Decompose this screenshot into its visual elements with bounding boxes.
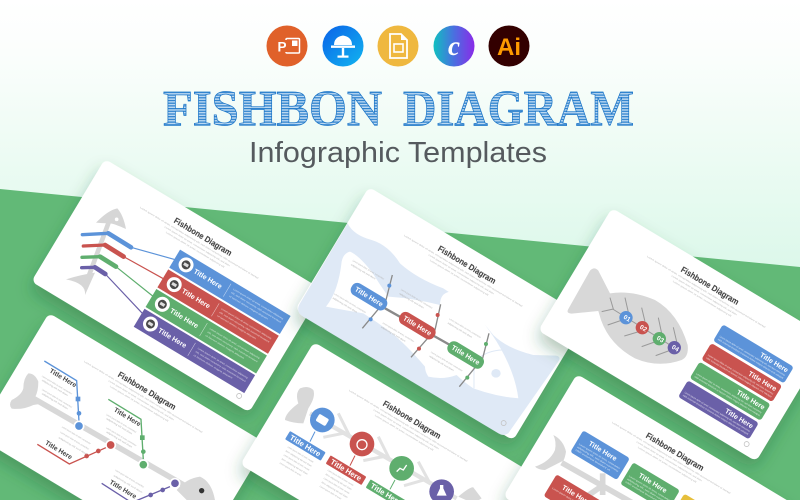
rib captions: Lorem ipsum dolor sit amet, consectetur	[333, 293, 367, 314]
green bar: Lorem ipsum dolor sit amet, consectetur adipiscing	[209, 327, 261, 360]
panel: slide 5 icon circles	[240, 342, 532, 500]
gray fish	[568, 268, 688, 364]
green card: Lorem ipsum dolor sit amet, consectetur adipiscing elit, sed diam nonummy	[695, 373, 763, 415]
tab captions: Lorem ipsum dolor sit amet	[279, 462, 302, 477]
red bar	[157, 269, 279, 354]
node 03	[653, 332, 666, 345]
tab captions: Lorem ipsum dolor sit amet, consec	[287, 446, 315, 464]
rib captions: adipiscing elit sed diam	[350, 263, 376, 280]
purple bar: ut laoreet dolore magna aliquam	[193, 354, 233, 380]
node 04	[668, 341, 681, 354]
slide 6 intro text: Lorem ipsum dolor sit amet, consectetur adipiscing elit	[637, 446, 697, 484]
rib captions: adipiscing elit sed diam	[332, 297, 358, 314]
branch captions: Lorem ipsum dolor sit amet, consectetur	[41, 388, 73, 409]
title: FISHBON	[163, 82, 382, 138]
panel: slide 3 numbered fish	[538, 208, 800, 461]
green node	[389, 456, 414, 489]
red branch	[37, 440, 115, 464]
branch captions: adipiscing elit sed diam	[41, 392, 68, 410]
green bar: elit, sed diam nonummy nibh euismod tincidunt	[207, 331, 258, 363]
branch captions: Lorem ipsum dolor sit amet, consectetur	[59, 431, 90, 451]
panel: slide 1 bars	[31, 159, 323, 412]
slide 1 footer icon	[236, 392, 243, 399]
slide 3 intro text: Lorem ipsum dolor sit amet, consectetur adipiscing elit	[672, 280, 732, 318]
slide 6 heading: Fishbone Diagram	[644, 430, 706, 473]
icon: PowerPoint	[266, 26, 308, 66]
red card	[544, 474, 603, 500]
blue card	[570, 430, 630, 480]
rib captions: adipiscing elit sed diam	[380, 326, 406, 343]
slide 1 intro text	[135, 206, 260, 287]
branch captions: Lorem ipsum dolor sit amet, consectetur	[114, 469, 145, 489]
gray fish skeleton	[535, 435, 633, 500]
blue bone	[82, 233, 174, 259]
green diagonal band	[0, 189, 800, 500]
slide 1 heading: Fishbone Diagram	[172, 215, 234, 258]
tab captions: Lorem ipsum dolor sit amet, consec	[327, 469, 355, 487]
red bar: ut laoreet dolore magna aliquam	[217, 314, 257, 340]
red bar: Title Here	[180, 288, 211, 310]
branch captions: adipiscing elit sed diam	[113, 474, 143, 494]
blue card: nibh euismod tincidunt ut	[575, 449, 611, 472]
blue rib	[362, 275, 392, 328]
node 01	[619, 311, 633, 324]
green card: nibh euismod tincidunt ut	[625, 481, 661, 500]
slide 2 intro text: Lorem ipsum dolor sit amet, consectetur adipiscing elit	[429, 259, 489, 297]
green pill	[445, 339, 486, 371]
slide 2 intro text: Lorem ipsum dolor sit amet, consectetur adipiscing elit, sed diam	[428, 254, 495, 295]
blue branch	[44, 361, 84, 431]
branch titles: Title Here	[48, 368, 78, 389]
branch captions: Lorem ipsum dolor sit amet, consectetur	[41, 375, 73, 396]
branch titles	[44, 368, 142, 500]
red pill: Title Here	[402, 315, 432, 338]
red node	[350, 432, 374, 466]
blue card: Lorem ipsum dolor sit amet, consectetur	[578, 443, 621, 470]
panel: slide 6 cards	[503, 374, 795, 500]
green card: Lorem ipsum dolor sit amet, consectetur	[628, 475, 671, 500]
slide 2 footer icon	[500, 420, 507, 426]
node 02	[636, 321, 649, 334]
slide 6 intro text: Lorem ipsum dolor sit amet, consectetur adipiscing elit, sed diam	[636, 441, 703, 482]
branch captions: Lorem ipsum dolor sit amet, consectetur	[61, 426, 91, 445]
icon: Canva	[434, 26, 474, 66]
purple bar: Title Here	[157, 327, 187, 350]
slide 4 intro text	[79, 360, 204, 441]
slide 4 heading: Fishbone Diagram	[116, 369, 178, 412]
slide 2 intro text: Lorem ipsum dolor sit amet, consectetur adipiscing elit, sed diam nonummy nibh euismod tincidunt ut laoreet	[403, 234, 524, 308]
purple bar	[134, 309, 255, 393]
tab captions	[279, 446, 355, 500]
white fish	[326, 252, 518, 398]
blue bar: Title Here	[192, 268, 223, 291]
green card: nibh euismod tincidunt ut laoreet dolore magna aliquam erat volutpat	[694, 375, 761, 417]
purple card: Lorem ipsum dolor sit amet, consectetur adipiscing elit, sed diam nonummy	[684, 391, 751, 433]
slide 4 intro text: Lorem ipsum dolor sit amet, consectetur adipiscing elit, sed diam nonummy nibh euismod tincidunt ut laoreet	[83, 360, 204, 434]
slide 3 intro text: Lorem ipsum dolor sit amet, consectetur adipiscing elit, sed diam	[671, 275, 738, 316]
red bone	[83, 245, 163, 278]
tab captions: tetur adipiscing elit sed diam	[281, 458, 308, 476]
red bar: elit, sed diam nonummy nibh euismod tincidunt	[219, 311, 270, 344]
blue card: Title Here	[758, 352, 789, 374]
node 02: 02	[638, 324, 648, 334]
purple branch	[102, 479, 180, 500]
purple bar: elit, sed diam nonummy nibh euismod tincidunt	[195, 350, 247, 383]
blue bar	[169, 250, 291, 334]
red card: nibh euismod tincidunt ut laoreet dolore magna aliquam erat volutpat	[705, 357, 772, 399]
branch captions	[41, 375, 145, 494]
branch captions: adipiscing elit sed diam	[105, 431, 133, 449]
branch titles: Title Here	[44, 440, 73, 461]
rib captions: Lorem ipsum dolor sit amet, consectetur	[400, 288, 433, 310]
rib captions: Lorem ipsum dolor sit amet, consectetur	[382, 322, 415, 343]
green card	[690, 362, 771, 421]
green bar: Title Here	[168, 308, 199, 330]
red card: Lorem ipsum dolor sit amet, consectetur adipiscing elit, sed diam nonummy	[707, 354, 775, 396]
purple node	[429, 479, 454, 500]
blue card: Lorem ipsum dolor sit amet, consectetur adipiscing elit, sed diam nonummy	[719, 335, 786, 377]
blue card: nibh euismod tincidunt ut laoreet dolore magna aliquam erat volutpat	[717, 338, 784, 380]
purple card	[678, 380, 759, 439]
tab captions: Lorem ipsum dolor sit amet, consec	[323, 477, 351, 495]
slide 5 intro text: Lorem ipsum dolor sit amet, consectetur adipiscing elit, sed diam	[373, 409, 440, 450]
rib captions: adipiscing elit sed diam	[398, 292, 424, 309]
node 03: 03	[655, 335, 665, 345]
blue card: Title Here	[587, 441, 618, 463]
green card: Title Here	[735, 389, 766, 412]
green bone	[82, 257, 153, 296]
red card: Title Here	[747, 371, 778, 393]
branch captions: adipiscing elit sed diam	[58, 436, 88, 456]
red rib	[411, 304, 441, 357]
gray fish skeleton	[10, 373, 215, 500]
blue tab: Title Here	[288, 433, 322, 459]
slide 1 intro text: Lorem ipsum dolor sit amet, consectetur adipiscing elit	[165, 231, 225, 269]
blue card	[713, 324, 794, 383]
slide 3 footer icon	[743, 441, 750, 447]
icon: Keynote	[322, 26, 364, 66]
blue bar: ut laoreet dolore magna aliquam	[228, 295, 269, 321]
green bar: ut laoreet dolore magna aliquam	[205, 334, 245, 360]
icon: Canva: c	[448, 31, 460, 61]
red card	[701, 343, 782, 402]
green card: Title Here	[637, 473, 668, 495]
spine	[385, 308, 450, 345]
rib captions: Lorem ipsum dolor sit amet, consectetur	[352, 259, 385, 281]
fish eye and gill	[474, 350, 503, 388]
tab captions: tetur adipiscing elit sed diam	[321, 481, 348, 499]
slide 1 intro text: Lorem ipsum dolor sit amet, consectetur adipiscing elit, sed diam	[164, 226, 231, 267]
green bar	[146, 289, 267, 373]
branch titles: Title Here	[108, 479, 138, 500]
green branch	[108, 399, 148, 469]
rib captions: adipiscing elit sed diam	[428, 355, 454, 372]
rib captions	[332, 259, 482, 372]
slide 6 intro text	[607, 421, 732, 500]
blue pill: Title Here	[353, 286, 384, 309]
panel: slide 2 fish background	[295, 187, 587, 440]
title: DIAGRAM	[403, 82, 634, 138]
background	[0, 0, 800, 268]
purple bone	[82, 267, 142, 313]
red pill	[397, 310, 438, 342]
slide 3 intro text	[642, 255, 767, 336]
blue node	[310, 408, 335, 442]
icon: PowerPoint: P	[278, 40, 287, 54]
tab captions: tetur adipiscing elit sed diam	[285, 450, 312, 468]
tab captions: Lorem ipsum dolor sit amet, consec	[283, 454, 311, 472]
blue card: adipiscing elit, sed diam nonummy	[576, 446, 620, 473]
slide 3 intro text: Lorem ipsum dolor sit amet, consectetur adipiscing elit, sed diam nonummy nibh euismod tincidunt ut laoreet	[646, 255, 767, 329]
purple card: Title Here	[723, 408, 754, 430]
purple card: nibh euismod tincidunt ut laoreet dolore magna aliquam erat volutpat	[682, 394, 749, 436]
branch captions: Lorem ipsum dolor sit amet, consectetur	[105, 413, 137, 434]
blue pill	[348, 281, 390, 313]
light blue sea shape	[298, 223, 560, 435]
subtitle: Infographic Templates	[249, 137, 547, 169]
fish bones	[602, 298, 677, 356]
slide 5 intro text: Lorem ipsum dolor sit amet, consectetur adipiscing elit, sed diam nonummy nibh euismod tincidunt ut laoreet	[348, 389, 469, 463]
slide 3 heading: Fishbone Diagram	[679, 264, 741, 307]
branch captions: adipiscing elit sed diam	[105, 417, 133, 435]
rib captions: adipiscing elit sed diam	[447, 322, 473, 339]
icon: Google Slides	[378, 26, 418, 66]
tab captions: tetur adipiscing elit sed diam	[325, 473, 352, 491]
green card	[620, 462, 680, 500]
branch titles: Title Here	[112, 407, 142, 428]
slide 5 intro text: Lorem ipsum dolor sit amet, consectetur adipiscing elit	[374, 414, 434, 452]
rib captions: Lorem ipsum dolor sit amet, consectetur	[448, 318, 482, 339]
red tab: Title Here	[329, 457, 363, 483]
slide 2 intro text	[399, 234, 524, 315]
green card: adipiscing elit, sed diam nonummy	[626, 478, 670, 500]
purple bar: Lorem ipsum dolor sit amet, consectetur adipiscing	[197, 347, 249, 380]
slide 4 intro text: Lorem ipsum dolor sit amet, consectetur adipiscing elit	[109, 385, 169, 423]
title	[163, 82, 634, 138]
red bar: Lorem ipsum dolor sit amet, consectetur adipiscing	[221, 308, 273, 341]
slide 6 intro text: Lorem ipsum dolor sit amet, consectetur adipiscing elit, sed diam nonummy nibh euismod tincidunt ut laoreet	[611, 421, 732, 495]
green pill: Title Here	[450, 345, 481, 367]
icon: Illustrator	[488, 26, 530, 66]
branch captions: adipiscing elit sed diam	[41, 379, 68, 397]
gray fish with ribs	[285, 387, 482, 500]
rib captions: Lorem ipsum dolor sit amet, consectetur	[430, 351, 463, 372]
app icons row	[266, 26, 530, 66]
panel: slide 4 timeline fishbone	[0, 313, 267, 500]
node 04: 04	[670, 344, 680, 354]
fish skeleton	[66, 208, 126, 295]
icon: Illustrator: Ai	[497, 34, 521, 61]
slide 2 heading: Fishbone Diagram	[436, 243, 498, 286]
green rib	[459, 333, 489, 387]
branch captions: Lorem ipsum dolor sit amet, consectetur	[105, 427, 137, 447]
slide 4 intro text: Lorem ipsum dolor sit amet, consectetur adipiscing elit, sed diam	[108, 380, 175, 421]
blue bar: elit, sed diam nonummy nibh euismod tincidunt	[230, 291, 282, 324]
blue bar: Lorem ipsum dolor sit amet, consectetur adipiscing	[233, 288, 285, 321]
slide 5 heading: Fishbone Diagram	[381, 398, 443, 441]
slide 1 intro text: Lorem ipsum dolor sit amet, consectetur adipiscing elit, sed diam nonummy nibh euismod tincidunt ut laoreet	[139, 206, 260, 280]
slide 5 intro text	[344, 389, 469, 470]
node 01: 01	[622, 314, 632, 324]
yellow card	[671, 494, 731, 500]
